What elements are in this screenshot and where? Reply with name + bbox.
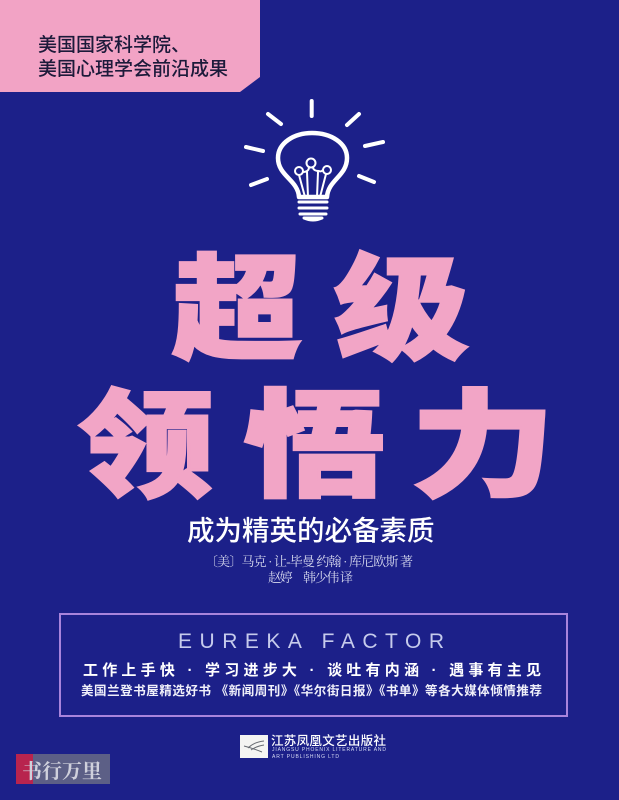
badge text: 美国国家科学院、 (38, 34, 190, 56)
badge text (38, 34, 228, 80)
authors: 〔美〕马克 · 让-毕曼 约翰 · 库尼欧斯 著 (205, 554, 413, 569)
publisher logo (240, 733, 386, 760)
title: 级 (334, 218, 469, 384)
tagline: 工作上手快 · 学习进步大 · 谈吐有内涵 · 遇事有主见 (83, 661, 541, 679)
badge text: 美国心理学会前沿成果 (38, 58, 228, 80)
title: 悟 (244, 353, 385, 521)
publisher name: 江苏凤凰文艺出版社 (271, 733, 386, 748)
icon: light bulb (246, 101, 383, 220)
publisher name (271, 733, 386, 760)
panel: English title and endorsements (60, 614, 567, 716)
title: 超 (172, 218, 301, 384)
panel: top-left badge (0, 0, 260, 92)
authors (205, 554, 413, 585)
publisher name: JIANGSU PHOENIX LITERATURE AND (272, 747, 386, 753)
title: 力 (411, 352, 555, 521)
English title: EUREKA FACTOR (178, 630, 444, 653)
subtitle: 成为精英的必备素质 (187, 515, 434, 546)
endorsements: 美国兰登书屋精选好书 《新闻周刊》《华尔街日报》《书单》等各大媒体倾情推荐 (81, 683, 542, 698)
watermark text: 书行万里 (22, 755, 102, 784)
publisher name: ART PUBLISHING LTD (272, 754, 339, 760)
authors: 赵婷 韩少伟 译 (268, 570, 353, 585)
title: 领 (78, 352, 214, 521)
watermark (16, 754, 110, 784)
title (78, 218, 555, 521)
